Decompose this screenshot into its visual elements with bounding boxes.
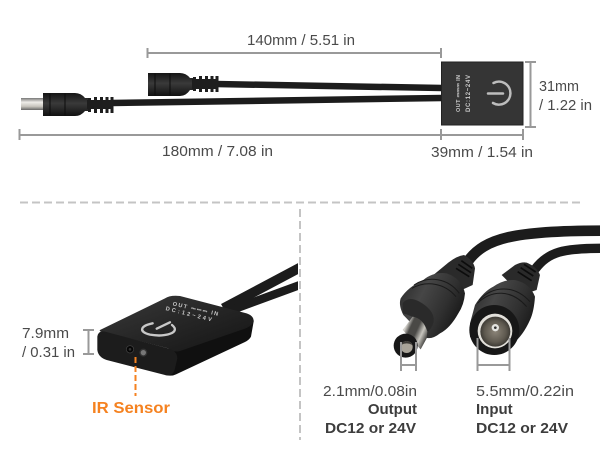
measure bracket: output [401,342,416,371]
panel: overall cable dimensions [19,32,592,161]
sensor holes [126,346,147,356]
box print: DC:12~24V [165,306,212,323]
female jack [469,262,540,355]
panel: connectors [323,231,600,437]
label: 7.9mm: / 0.31 in [22,344,75,361]
label: input: Input [476,401,513,418]
label: output: DC12 or 24V [325,420,416,437]
label: output: Output [368,401,417,418]
dimension: 140mm line [147,48,441,58]
label: 180mm: 180mm / 7.08 in [162,143,273,160]
label: 31mm [539,78,592,114]
panel: IR sensor [22,267,302,417]
box print [456,75,472,112]
cables to switch [223,267,302,311]
measure bracket: input [478,338,510,371]
label: output: 2.1mm/0.08in [323,383,417,400]
female connector [148,73,218,96]
male plug [394,255,475,358]
dimension: 31mm line [525,62,536,127]
box print [165,301,219,323]
label: 140mm: 140mm / 5.51 in [247,32,355,49]
sensor leader line [134,357,136,396]
divider [20,202,580,204]
box print: OUT ⎓⎓⎓ IN [172,301,219,318]
label: input [476,383,574,437]
label: 31mm: / 1.22 in [539,97,592,114]
label: 7.9mm: 7.9mm [22,325,69,342]
box print: DC:12~24V [466,75,472,112]
label: input: 5.5mm/0.22in [476,383,574,400]
icon: power symbol [488,82,510,105]
icon: power symbol [142,322,175,335]
label: input: DC12 or 24V [476,420,568,437]
label: output [323,383,417,437]
dimension: 180mm line [19,129,523,140]
male connector [21,93,114,116]
cables [468,231,600,269]
label: IR Sensor: IR Sensor [92,400,170,417]
switch photo [97,296,254,376]
label: 31mm: 31mm [539,78,579,95]
switch box [442,62,523,125]
dimension: 7.9mm bracket [83,330,94,354]
label: 7.9mm [22,325,75,361]
label: 39mm: 39mm / 1.54 in [431,144,533,161]
cables [112,84,442,103]
box print: OUT ⎓⎓⎓ IN [456,75,462,112]
